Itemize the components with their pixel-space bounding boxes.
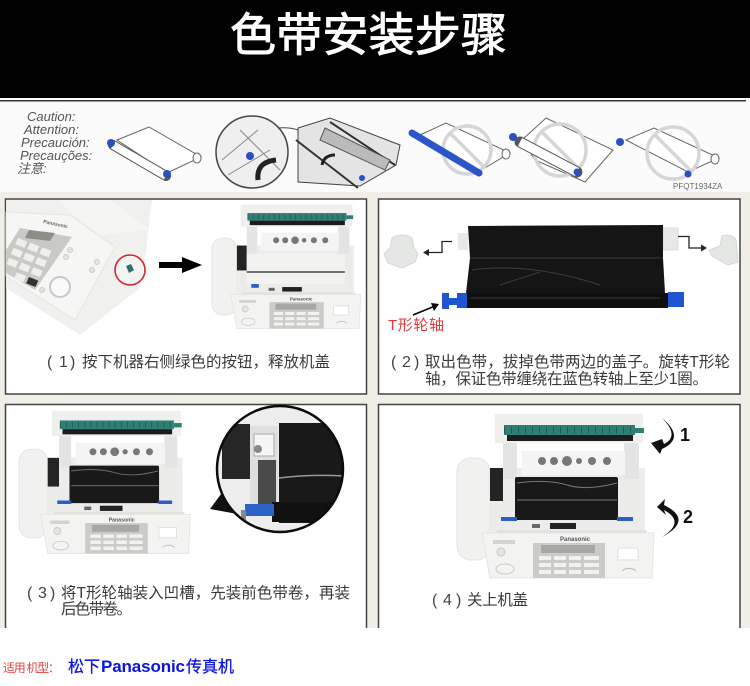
caps	[384, 235, 738, 268]
footer: applicable model: 传真机	[186, 658, 234, 676]
step 4 text	[432, 591, 528, 609]
icon: wrong ribbon 2	[509, 118, 613, 182]
footer: applicable model: 适用 机型：	[3, 661, 60, 675]
icon: wrong ribbon 1	[412, 123, 510, 174]
icon: installation magnifier	[216, 116, 322, 188]
fax machine with ribbon closing	[457, 414, 654, 578]
zoom inset	[210, 406, 345, 532]
callout: green button	[115, 255, 145, 285]
caution labels: Precauções:	[20, 148, 93, 163]
beige backdrop behind step panels	[0, 192, 750, 628]
step 4 text: (4)	[432, 592, 461, 609]
footer: applicable model: Panasonic	[101, 657, 185, 676]
curved arrow 2	[657, 499, 693, 537]
step 4 text: 关上机盖	[467, 591, 528, 609]
panel: step 1	[2, 199, 366, 394]
caution labels: 注意:	[17, 161, 47, 176]
step 3 text: 将T形轮轴装入凹槽，先装前色带卷，再装	[61, 584, 350, 602]
arrows: remove caps	[423, 236, 707, 256]
fax machine with ribbon: Panasonic	[109, 517, 135, 523]
arrow to T shaft	[413, 303, 439, 315]
icon: correct ribbon	[107, 127, 201, 178]
caution strip	[0, 102, 750, 192]
red label: T形轮轴	[388, 317, 444, 334]
fax machine open: Panasonic	[290, 297, 313, 302]
panel: step 3	[6, 404, 366, 628]
caution labels: Attention:	[23, 122, 79, 137]
step 3 text: (3)	[27, 585, 55, 602]
curved arrow 2: 2	[683, 507, 693, 527]
arrow	[159, 257, 202, 273]
caution labels: Precaución:	[21, 135, 90, 150]
fax machine with ribbon closing: Panasonic	[560, 537, 591, 543]
title banner	[0, 0, 750, 102]
caution labels: Caution:	[27, 109, 76, 124]
footer: applicable model	[3, 657, 234, 676]
ribbon roll	[442, 225, 684, 309]
fax machine with ribbon	[19, 411, 190, 554]
step 1 text: (1)	[47, 354, 75, 371]
step 1 text: 按下机器右侧绿色的按钮，释放机盖	[82, 353, 330, 371]
icon: wrong ribbon 3	[616, 127, 719, 179]
panel: step 4	[378, 404, 740, 628]
fax machine angled view: Panasonic	[43, 219, 69, 230]
footer: applicable model: 松下	[68, 658, 100, 676]
step 2 text: 取出色带，拔掉色带两边的盖子。旋转T形轮	[425, 353, 730, 371]
fax machine angled view	[2, 200, 152, 335]
curved arrow 1: 1	[680, 425, 690, 445]
caution labels	[17, 109, 93, 176]
panel: step 2	[378, 199, 740, 394]
title banner: 色带安装步骤	[230, 9, 507, 61]
part number: PFQT1934ZA	[673, 182, 723, 191]
icon: fax line drawing	[296, 118, 400, 188]
step 2 text: (2)	[391, 354, 419, 371]
fax machine open	[212, 205, 361, 329]
curved arrow 1	[651, 418, 690, 454]
step 3 text: 后色带卷。	[61, 600, 132, 618]
step 2 text	[391, 353, 730, 388]
step 2 text: 轴，保证色带缠绕在蓝色转轴上至少1圈。	[425, 370, 708, 388]
step 3 text	[27, 584, 350, 618]
